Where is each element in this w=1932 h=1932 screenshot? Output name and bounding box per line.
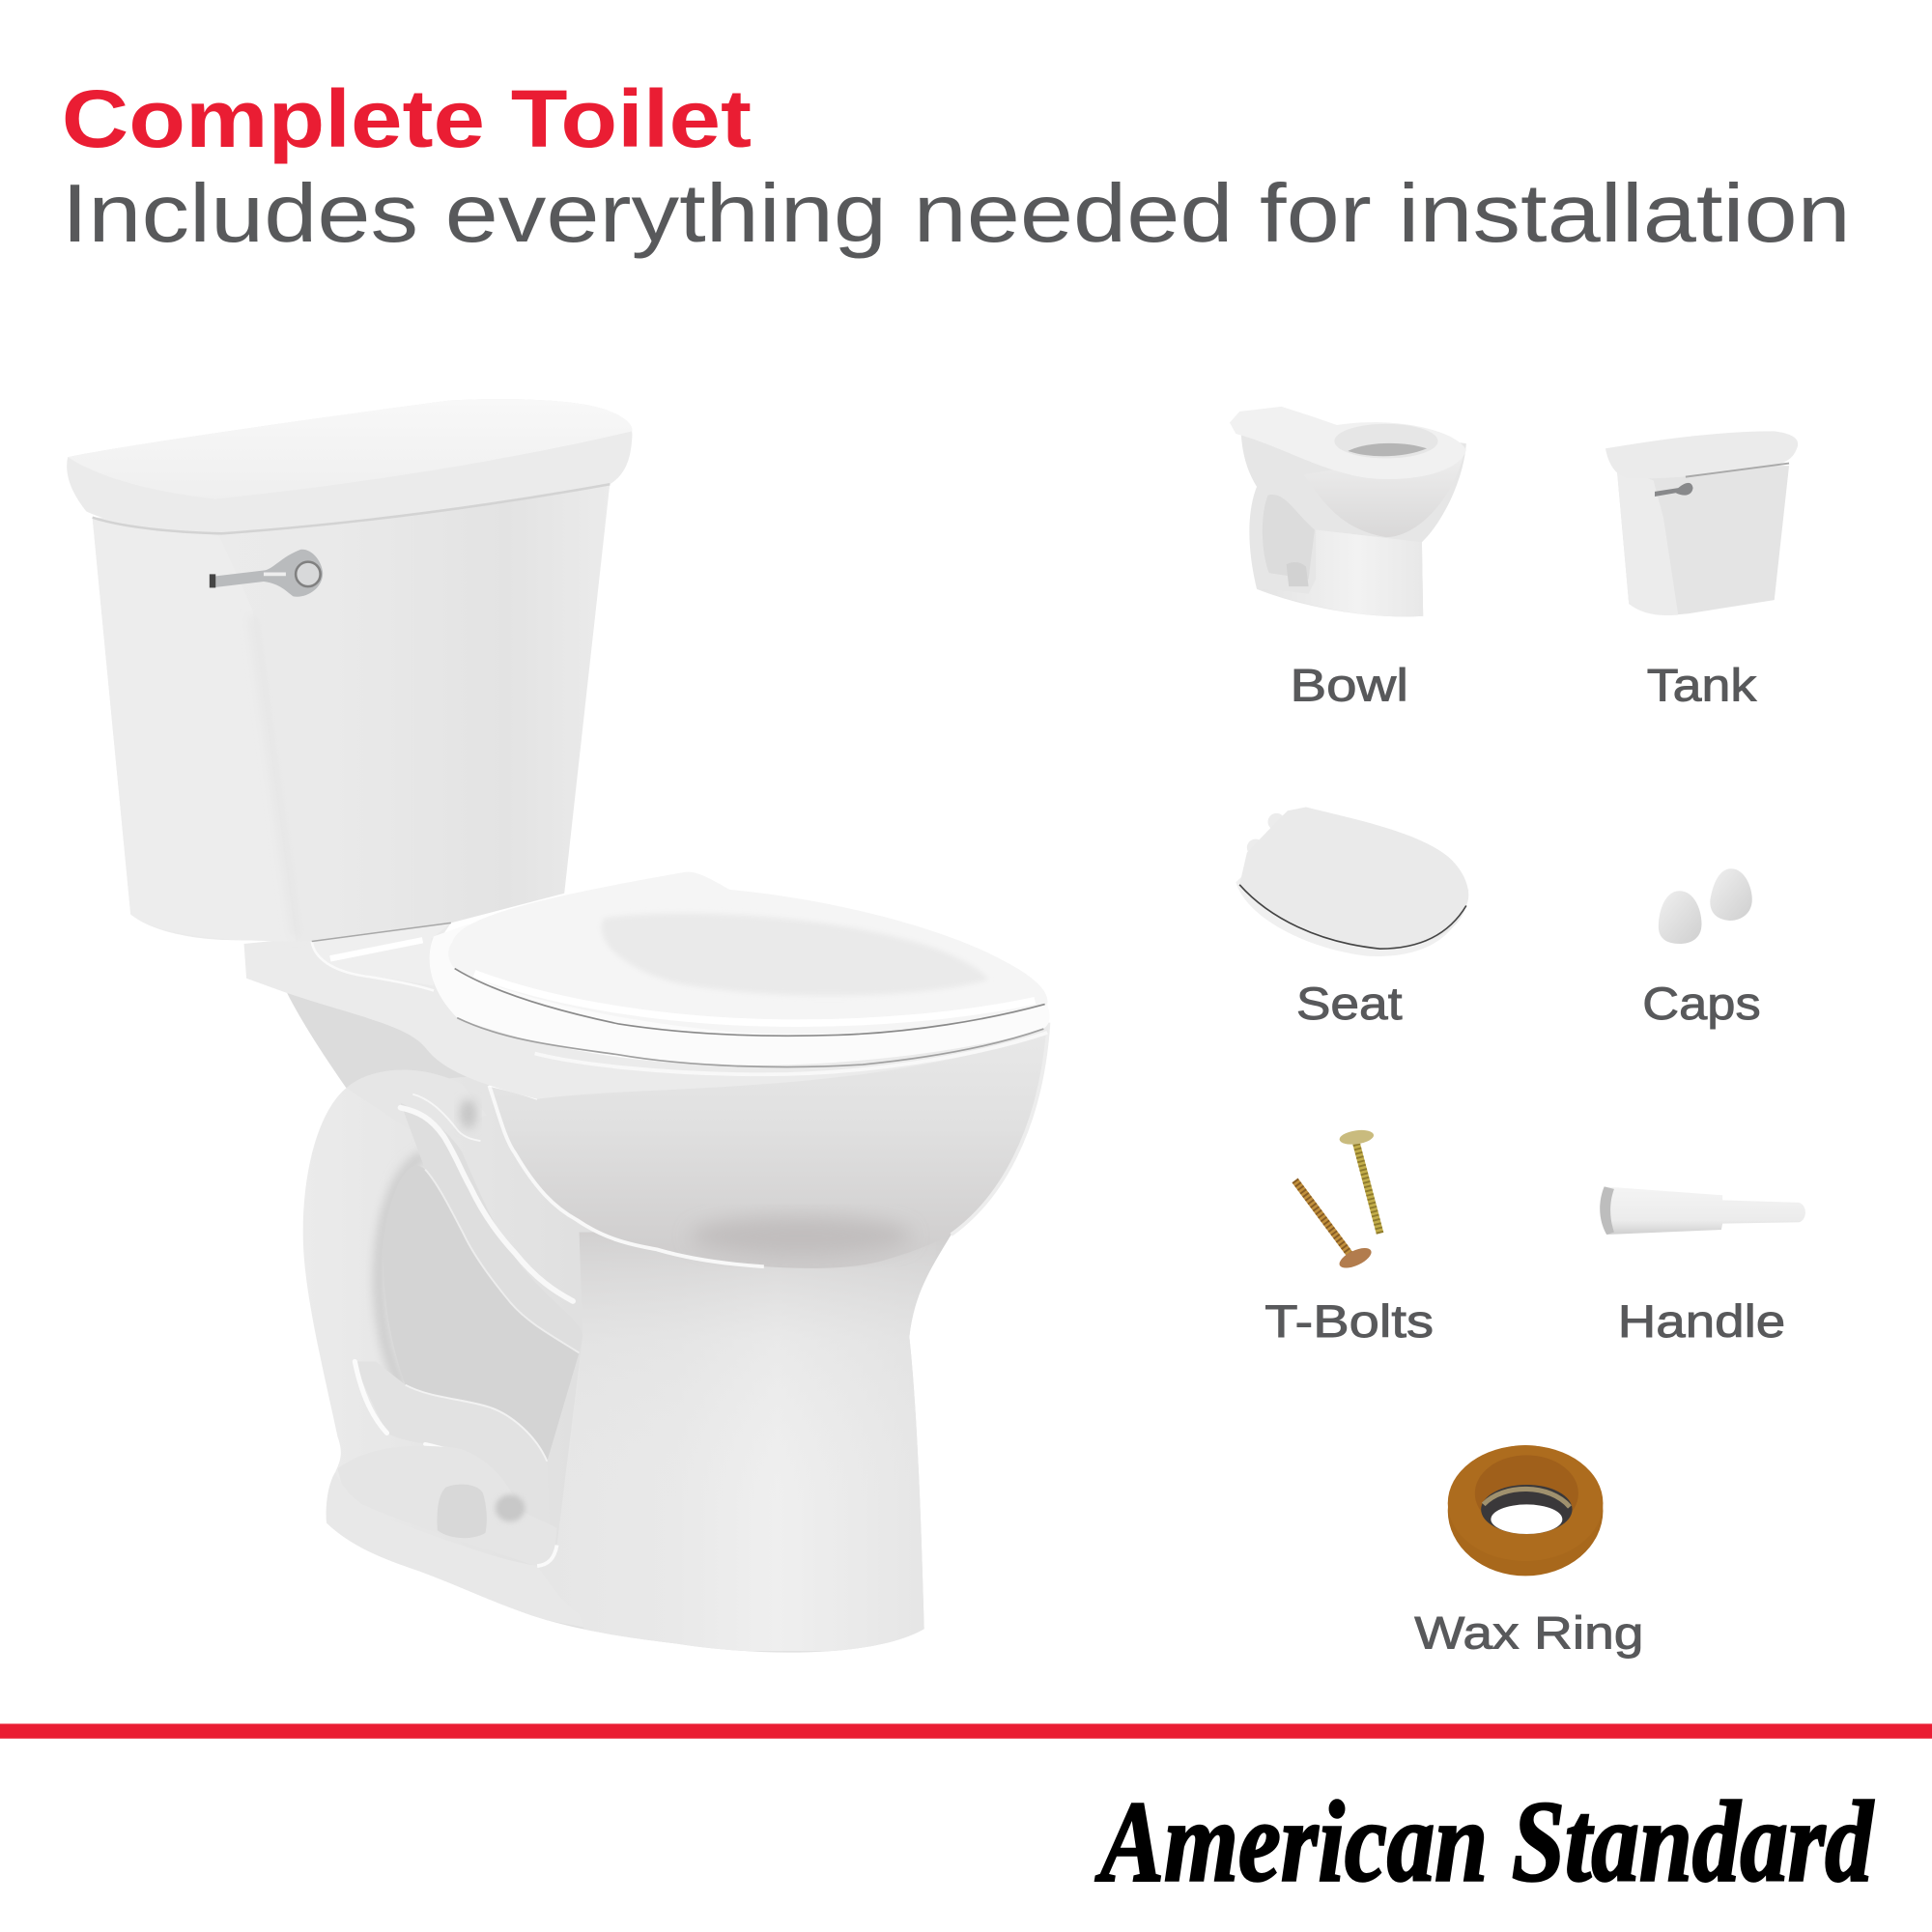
base floor [337,1446,557,1566]
tank part image [1605,431,1798,615]
title: Complete Toilet [62,73,752,164]
footer red rule [0,1723,1932,1739]
bowl label: Bowl [1290,661,1408,712]
bowl contour highlight [489,1086,764,1266]
tank bevel [93,518,296,941]
pedestal [580,1233,951,1651]
lid gap line [455,969,1045,1036]
tank label: Tank [1647,661,1757,712]
bowl shadow [690,1216,912,1256]
trapway recess [384,1166,579,1462]
serpentine highlight [401,1108,573,1301]
seat label: Seat [1296,979,1403,1030]
bowl part image [1230,407,1466,616]
tank lid top [68,399,632,499]
t-bolts part image [1295,1128,1380,1272]
subtitle: Includes everything needed for installation [62,168,1851,260]
tank lid front face [67,399,632,533]
tank body [93,483,610,941]
part: wax ring [1414,1445,1644,1660]
base lip [327,1472,591,1629]
caps part image [1659,868,1752,944]
wax ring part image [1448,1445,1603,1576]
trap arch top [346,1069,487,1140]
handle part image [1600,1186,1805,1235]
flush handle [210,550,323,597]
seat part image [1236,807,1468,956]
part: handle [1600,1186,1805,1348]
rim white line [535,1033,1047,1074]
pocket shade [496,1494,525,1521]
deck lower highlight [312,941,434,991]
part: caps [1642,868,1761,1030]
bolt cap on base [437,1485,487,1538]
seat ring [430,924,1050,1065]
bowl upper line [489,1086,537,1099]
handle label: Handle [1618,1296,1785,1348]
part: bowl [1230,407,1466,712]
seat lid front highlight [474,974,1035,1023]
lid lower lip [93,484,610,533]
shadow pocket [460,1099,477,1128]
upper small highlight [412,1094,480,1141]
seat lid [448,872,1047,1034]
part: seat [1236,807,1468,1030]
deck highlight [330,940,423,958]
serpentine band [401,1103,582,1353]
caps label: Caps [1642,979,1761,1030]
tank bottom line [312,923,451,941]
part: t-bolts [1264,1128,1434,1348]
bowl right light edge [952,1023,1048,1235]
trap lower highlight [425,1444,519,1511]
arch inner shade [380,1155,425,1386]
lower body silhouette [303,1072,952,1653]
neck under deck [287,985,537,1088]
trap upper highlight [406,1385,547,1462]
trap highlights [355,1361,387,1433]
deck and rim strip [244,923,1048,1099]
rim gap line [457,1018,1043,1067]
part: tank [1605,431,1798,712]
t-bolts label: T-Bolts [1264,1296,1434,1348]
main toilet illustration [67,399,1050,1653]
recess corner highlight [537,1545,557,1566]
tank bevel shade [252,616,296,936]
deck top [312,923,451,985]
bowl [469,985,1048,1268]
wax ring label: Wax Ring [1414,1608,1644,1660]
lower trap [355,1361,550,1528]
seat lid recess [602,913,988,996]
recess edge line [425,1169,579,1353]
